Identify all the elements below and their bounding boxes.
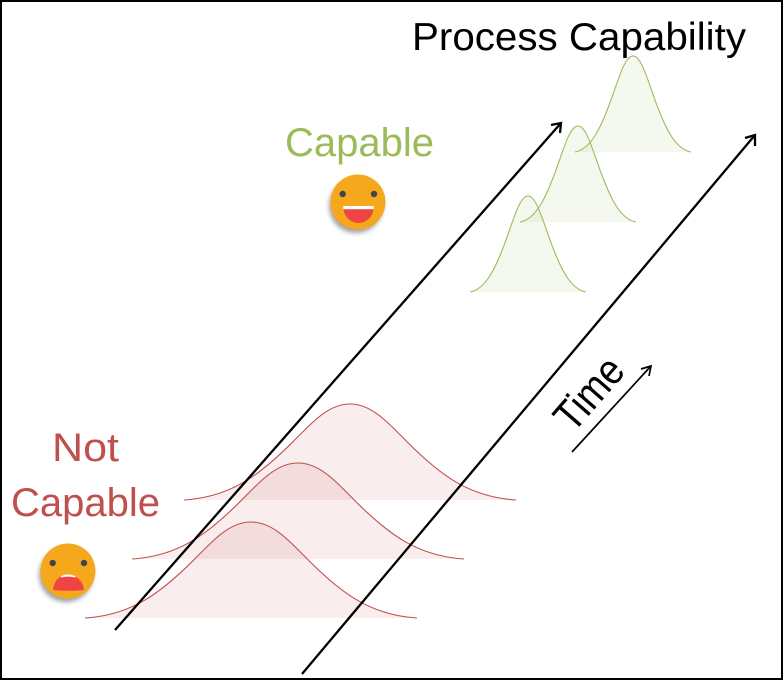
- distribution: not capable, latest: [184, 404, 516, 500]
- distribution: not capable, earliest: [85, 522, 417, 618]
- label: time: Time: [544, 347, 634, 441]
- label: capable: Capable: [285, 121, 434, 165]
- label: not capable: Capable: [11, 481, 160, 525]
- icon: happy face: [329, 174, 386, 233]
- icon: scared face: [39, 544, 96, 602]
- distribution: capable, earliest: [470, 196, 586, 292]
- distribution: not capable, middle: [132, 463, 464, 559]
- distribution: capable, latest: [575, 56, 691, 152]
- arrow: time direction: [572, 366, 651, 452]
- distribution: capable, middle: [520, 126, 636, 222]
- label: not capable: Not: [52, 426, 119, 470]
- title: Process Capability: [412, 16, 747, 59]
- label: not capable: [11, 426, 160, 525]
- arrow: upper time trend: [115, 123, 561, 630]
- arrow: lower time trend: [302, 135, 755, 674]
